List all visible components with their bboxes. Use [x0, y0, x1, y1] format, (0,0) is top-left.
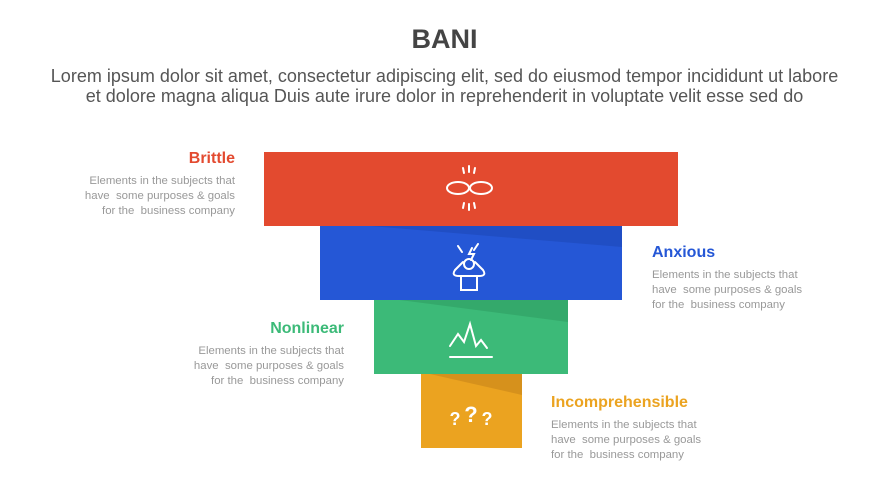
title: BANI: [412, 24, 478, 54]
subtitle: et dolore magna aliqua Duis aute irure dolor in reprehenderit in voluptate velit esse sed do: [86, 86, 803, 106]
label: nonlinear: [194, 320, 344, 387]
icon: question marks: [450, 402, 492, 429]
bar: anxious: [320, 226, 622, 300]
label: nonlinear: Elements in the subjects that: [198, 345, 344, 357]
label: anxious: for the business company: [652, 299, 785, 311]
label: anxious: Anxious: [652, 244, 715, 261]
label: incomprehensible: for the business company: [551, 449, 684, 461]
icon: question marks: ?: [450, 409, 460, 429]
label: incomprehensible: have some purposes & goals: [551, 434, 701, 446]
label: anxious: Elements in the subjects that: [652, 269, 798, 281]
label: brittle: for the business company: [102, 205, 235, 217]
bar: brittle: [264, 152, 678, 226]
label: nonlinear: for the business company: [211, 375, 344, 387]
label: brittle: have some purposes & goals: [85, 190, 235, 202]
bar: incomprehensible: [421, 374, 522, 448]
label: incomprehensible: Elements in the subjects that: [551, 419, 697, 431]
icon: question marks: ?: [482, 409, 492, 429]
label: incomprehensible: [551, 394, 701, 461]
icon: broken chain: [447, 166, 492, 210]
icon: question marks: ?: [464, 402, 478, 427]
icon: stressed person: [454, 244, 484, 290]
label: incomprehensible: Incomprehensible: [551, 394, 688, 411]
label: anxious: [652, 244, 802, 311]
label: nonlinear: Nonlinear: [270, 320, 344, 337]
label: nonlinear: have some purposes & goals: [194, 360, 344, 372]
icon: line chart: [450, 324, 492, 357]
bar: nonlinear: [374, 300, 568, 374]
label: anxious: have some purposes & goals: [652, 284, 802, 296]
label: brittle: Elements in the subjects that: [89, 175, 235, 187]
label: brittle: [85, 150, 235, 217]
label: brittle: Brittle: [189, 150, 235, 167]
subtitle: Lorem ipsum dolor sit amet, consectetur adipiscing elit, sed do eiusmod tempor incididunt ut labore: [51, 66, 838, 86]
subtitle: [51, 66, 838, 106]
